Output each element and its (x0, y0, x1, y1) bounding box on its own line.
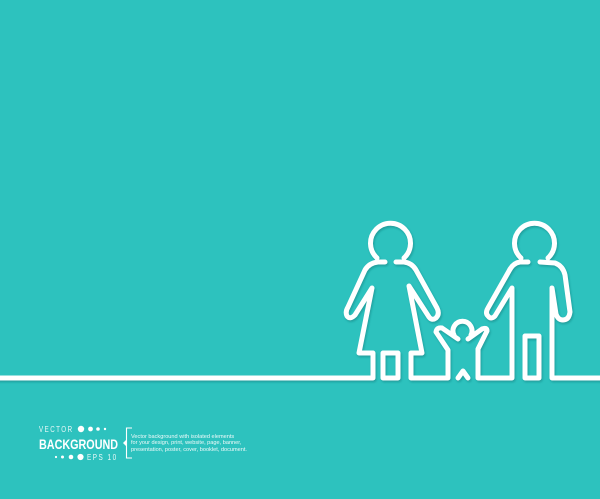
bracket (123, 428, 132, 458)
lower dots (54, 454, 84, 460)
background heading: BACKGROUND (39, 436, 118, 452)
line shadow (0, 225, 600, 380)
upper dots (78, 426, 106, 432)
logo block (39, 424, 247, 462)
vector label: VECTOR (39, 424, 74, 434)
white outline: woman, child and man (0, 223, 600, 378)
description (131, 434, 247, 453)
child leg gap (458, 371, 468, 378)
description: for your design, print, website, page, banner, (131, 440, 241, 446)
description: presentation, poster, cover, booklet, document. (131, 447, 247, 453)
eps label: EPS 10 (87, 452, 118, 462)
description: Vector background with isolated elements (131, 434, 234, 440)
woman leg gap (383, 353, 398, 378)
man leg gap (525, 336, 539, 378)
